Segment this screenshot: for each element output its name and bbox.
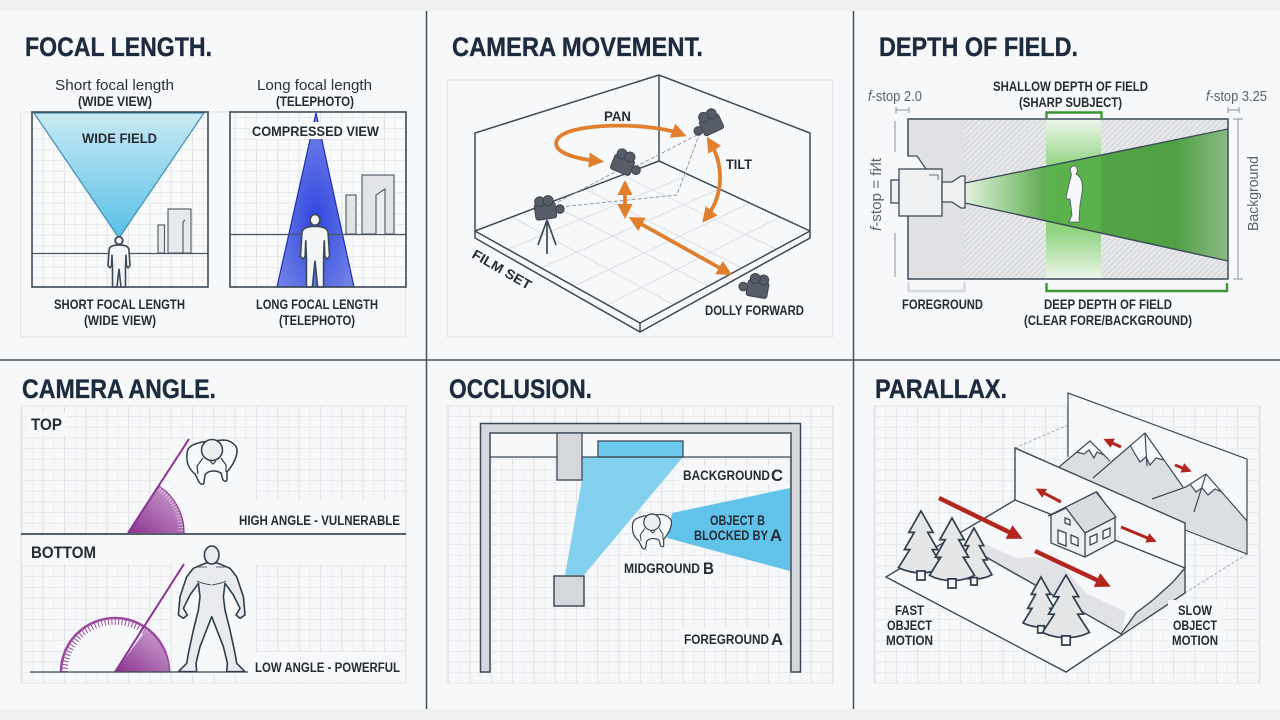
heroic figure <box>178 546 245 672</box>
depth of field title: DEPTH OF FIELD. <box>879 32 1078 62</box>
short focal length caption: SHORT FOCAL LENGTH <box>54 297 185 312</box>
tilt arrow <box>706 142 720 218</box>
fast object motion label: FAST <box>895 603 925 618</box>
foreground A label: A <box>771 630 783 649</box>
f-stop 2.0 label: f-stop 2.0 <box>868 89 922 105</box>
midground B label: B <box>703 559 714 578</box>
foreground A label <box>680 628 786 649</box>
focal length grid frame <box>20 112 406 337</box>
foreground bracket <box>908 282 964 291</box>
subject figure <box>108 237 130 287</box>
connecting dashes <box>1015 425 1247 593</box>
long focal length caption: LONG FOCAL LENGTH <box>256 297 378 312</box>
rotated background label: Background <box>1246 156 1262 231</box>
foreground object A <box>554 576 584 606</box>
rotated f-stop label: f-stop = fi⁄lt <box>869 158 885 231</box>
focus band <box>1046 119 1101 279</box>
fast motion arrows <box>939 498 1101 582</box>
midground figure from above <box>632 514 672 549</box>
panel: occlusion <box>447 374 833 683</box>
top label: TOP <box>31 415 62 434</box>
near trees <box>898 511 1090 645</box>
deep bracket <box>1046 283 1227 291</box>
high angle wedge <box>128 439 189 533</box>
dolly camera <box>738 271 770 299</box>
deep depth caption: (CLEAR FORE/BACKGROUND) <box>1024 313 1192 328</box>
vertical move arrow <box>623 186 627 213</box>
long focal length heading: Long focal length <box>257 78 372 94</box>
narrow field cone <box>277 113 354 287</box>
upper camera <box>688 107 724 140</box>
slow object motion label <box>1168 600 1222 650</box>
occlusion grid <box>447 406 833 683</box>
background building <box>158 209 191 253</box>
panel: depth of field <box>868 32 1267 328</box>
long focal length heading: (TELEPHOTO) <box>276 94 354 109</box>
fast object motion label: MOTION <box>886 633 933 648</box>
mid plane with ground <box>886 448 1185 672</box>
panel: camera angle <box>21 374 406 683</box>
house <box>1048 492 1116 557</box>
object B blocked label <box>694 513 782 545</box>
long focal length heading <box>257 78 372 109</box>
object B blocked label: A <box>770 526 782 545</box>
slow object motion label: OBJECT <box>1173 618 1218 633</box>
subject side profile <box>1066 166 1082 222</box>
foreground A label: FOREGROUND <box>684 632 769 647</box>
diagram: wide view <box>32 112 208 287</box>
long focal length caption: (TELEPHOTO) <box>279 313 355 328</box>
midground B label <box>620 558 718 578</box>
shallow depth heading: SHALLOW DEPTH OF FIELD <box>993 79 1148 94</box>
object B blocked label: OBJECT B <box>710 513 765 528</box>
compressed background buildings <box>346 175 394 234</box>
short focal length heading: Short focal length <box>55 78 174 94</box>
angle grid <box>21 406 406 683</box>
low angle label: LOW ANGLE - POWERFUL <box>255 660 400 675</box>
long focal length caption <box>256 297 378 328</box>
wide field label: WIDE FIELD <box>82 131 157 146</box>
shallow depth heading: (SHARP SUBJECT) <box>1019 95 1122 110</box>
panel: focal length <box>20 32 406 337</box>
back room strip <box>490 433 791 457</box>
far plane with mountains <box>1058 393 1247 554</box>
film set label: FILM SET <box>470 247 535 293</box>
dimension marks <box>895 107 1243 279</box>
light cone <box>965 129 1228 261</box>
dolly forward label: DOLLY FORWARD <box>705 303 804 318</box>
top bracket <box>1046 112 1102 119</box>
room walls <box>480 424 800 672</box>
short focal length heading: (WIDE VIEW) <box>78 94 152 109</box>
background C label: BACKGROUND <box>683 468 770 483</box>
fast object motion label: OBJECT <box>887 618 933 633</box>
bottom label: BOTTOM <box>31 543 96 562</box>
compressed view label: COMPRESSED VIEW <box>252 124 379 139</box>
tripod camera <box>533 194 565 254</box>
panel: parallax <box>874 374 1260 683</box>
slow motion arrows <box>1110 442 1185 469</box>
parallax title: PARALLAX. <box>875 374 1007 404</box>
camera movement title: CAMERA MOVEMENT. <box>452 32 703 62</box>
wide field cone <box>34 113 204 238</box>
shallow depth heading <box>993 79 1148 110</box>
blocked sight cone <box>565 457 683 575</box>
fast object motion label <box>886 603 933 648</box>
deep depth caption: DEEP DEPTH OF FIELD <box>1044 297 1172 312</box>
subject figure large <box>300 214 330 287</box>
deep depth caption <box>1024 297 1192 328</box>
pan label: PAN <box>604 109 631 124</box>
focal length title: FOCAL LENGTH. <box>25 32 212 62</box>
tilt label: TILT <box>726 157 753 172</box>
camera angle title: CAMERA ANGLE. <box>22 374 216 404</box>
middle camera <box>610 147 646 179</box>
low angle protractor <box>30 564 248 672</box>
figure from above <box>187 440 237 484</box>
occlusion title: OCCLUSION. <box>449 374 592 404</box>
slow object motion label: SLOW <box>1178 603 1212 618</box>
f-stop 3.25 label: f-stop 3.25 <box>1206 89 1267 105</box>
panel: camera movement <box>448 32 832 337</box>
short focal length heading <box>55 78 174 109</box>
midground B label: MIDGROUND <box>624 561 700 576</box>
film set room <box>475 75 810 332</box>
diagram: telephoto <box>230 112 406 287</box>
short focal length caption <box>54 297 185 328</box>
high angle label: HIGH ANGLE - VULNERABLE <box>239 513 400 528</box>
mid motion arrows <box>1042 492 1150 539</box>
foreground label: FOREGROUND <box>902 297 983 312</box>
camera body <box>891 169 965 216</box>
slow object motion label: MOTION <box>1172 633 1218 648</box>
depth chart <box>906 119 1228 279</box>
dolly arrow <box>634 220 727 272</box>
short focal length caption: (WIDE VIEW) <box>84 313 156 328</box>
movement grid frame <box>448 80 832 337</box>
background C label: C <box>771 466 783 485</box>
pan arrow <box>556 126 681 161</box>
parallax grid <box>874 406 1260 683</box>
background object C <box>598 441 683 457</box>
camera path dashes <box>558 135 699 207</box>
pillar <box>557 433 582 480</box>
object B blocked label: BLOCKED BY <box>694 528 768 543</box>
object B sight cone <box>667 488 790 571</box>
